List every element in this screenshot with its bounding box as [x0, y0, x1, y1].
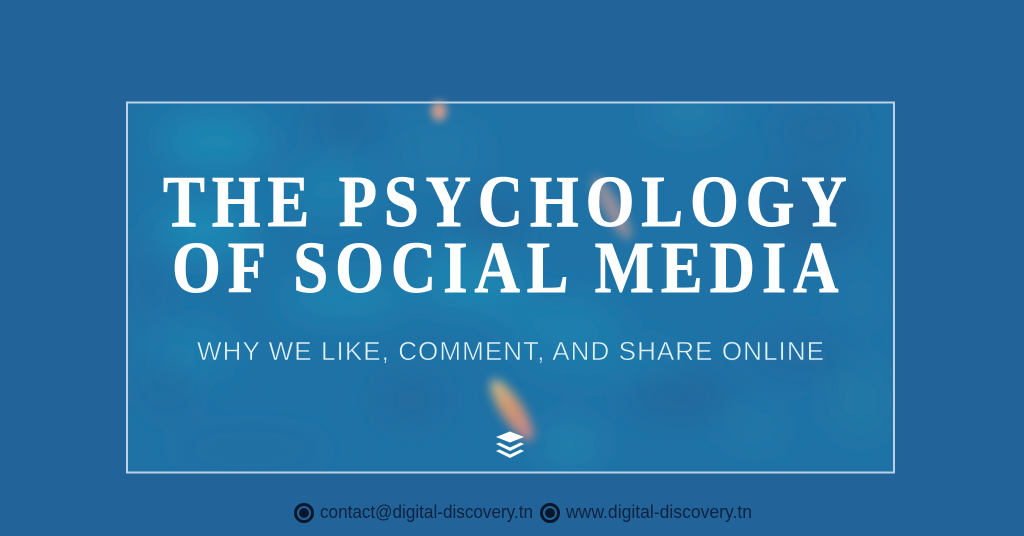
title — [163, 161, 847, 308]
icon: website bullet — [542, 504, 558, 522]
infographic canvas — [126, 96, 895, 523]
footer contact — [296, 502, 752, 522]
email address: contact@digital-discovery.tn — [320, 502, 533, 522]
lighter teal patches — [160, 114, 270, 170]
orange blur: bottom fish — [483, 374, 541, 446]
title line 1: THE PSYCHOLOGY — [163, 161, 847, 242]
icon: layers logo — [496, 432, 524, 458]
panel border — [127, 102, 894, 472]
orange blur: top fish — [431, 101, 447, 121]
title line 2: OF SOCIAL MEDIA — [172, 227, 838, 308]
darker patches — [312, 104, 384, 140]
panel: blurred water photo — [128, 92, 894, 472]
subtitle: WHY WE LIKE, COMMENT, AND SHARE ONLINE — [197, 336, 824, 366]
icon: email bullet — [296, 504, 312, 522]
orange blur: middle fish — [586, 172, 638, 244]
website address: www.digital-discovery.tn — [565, 502, 752, 522]
